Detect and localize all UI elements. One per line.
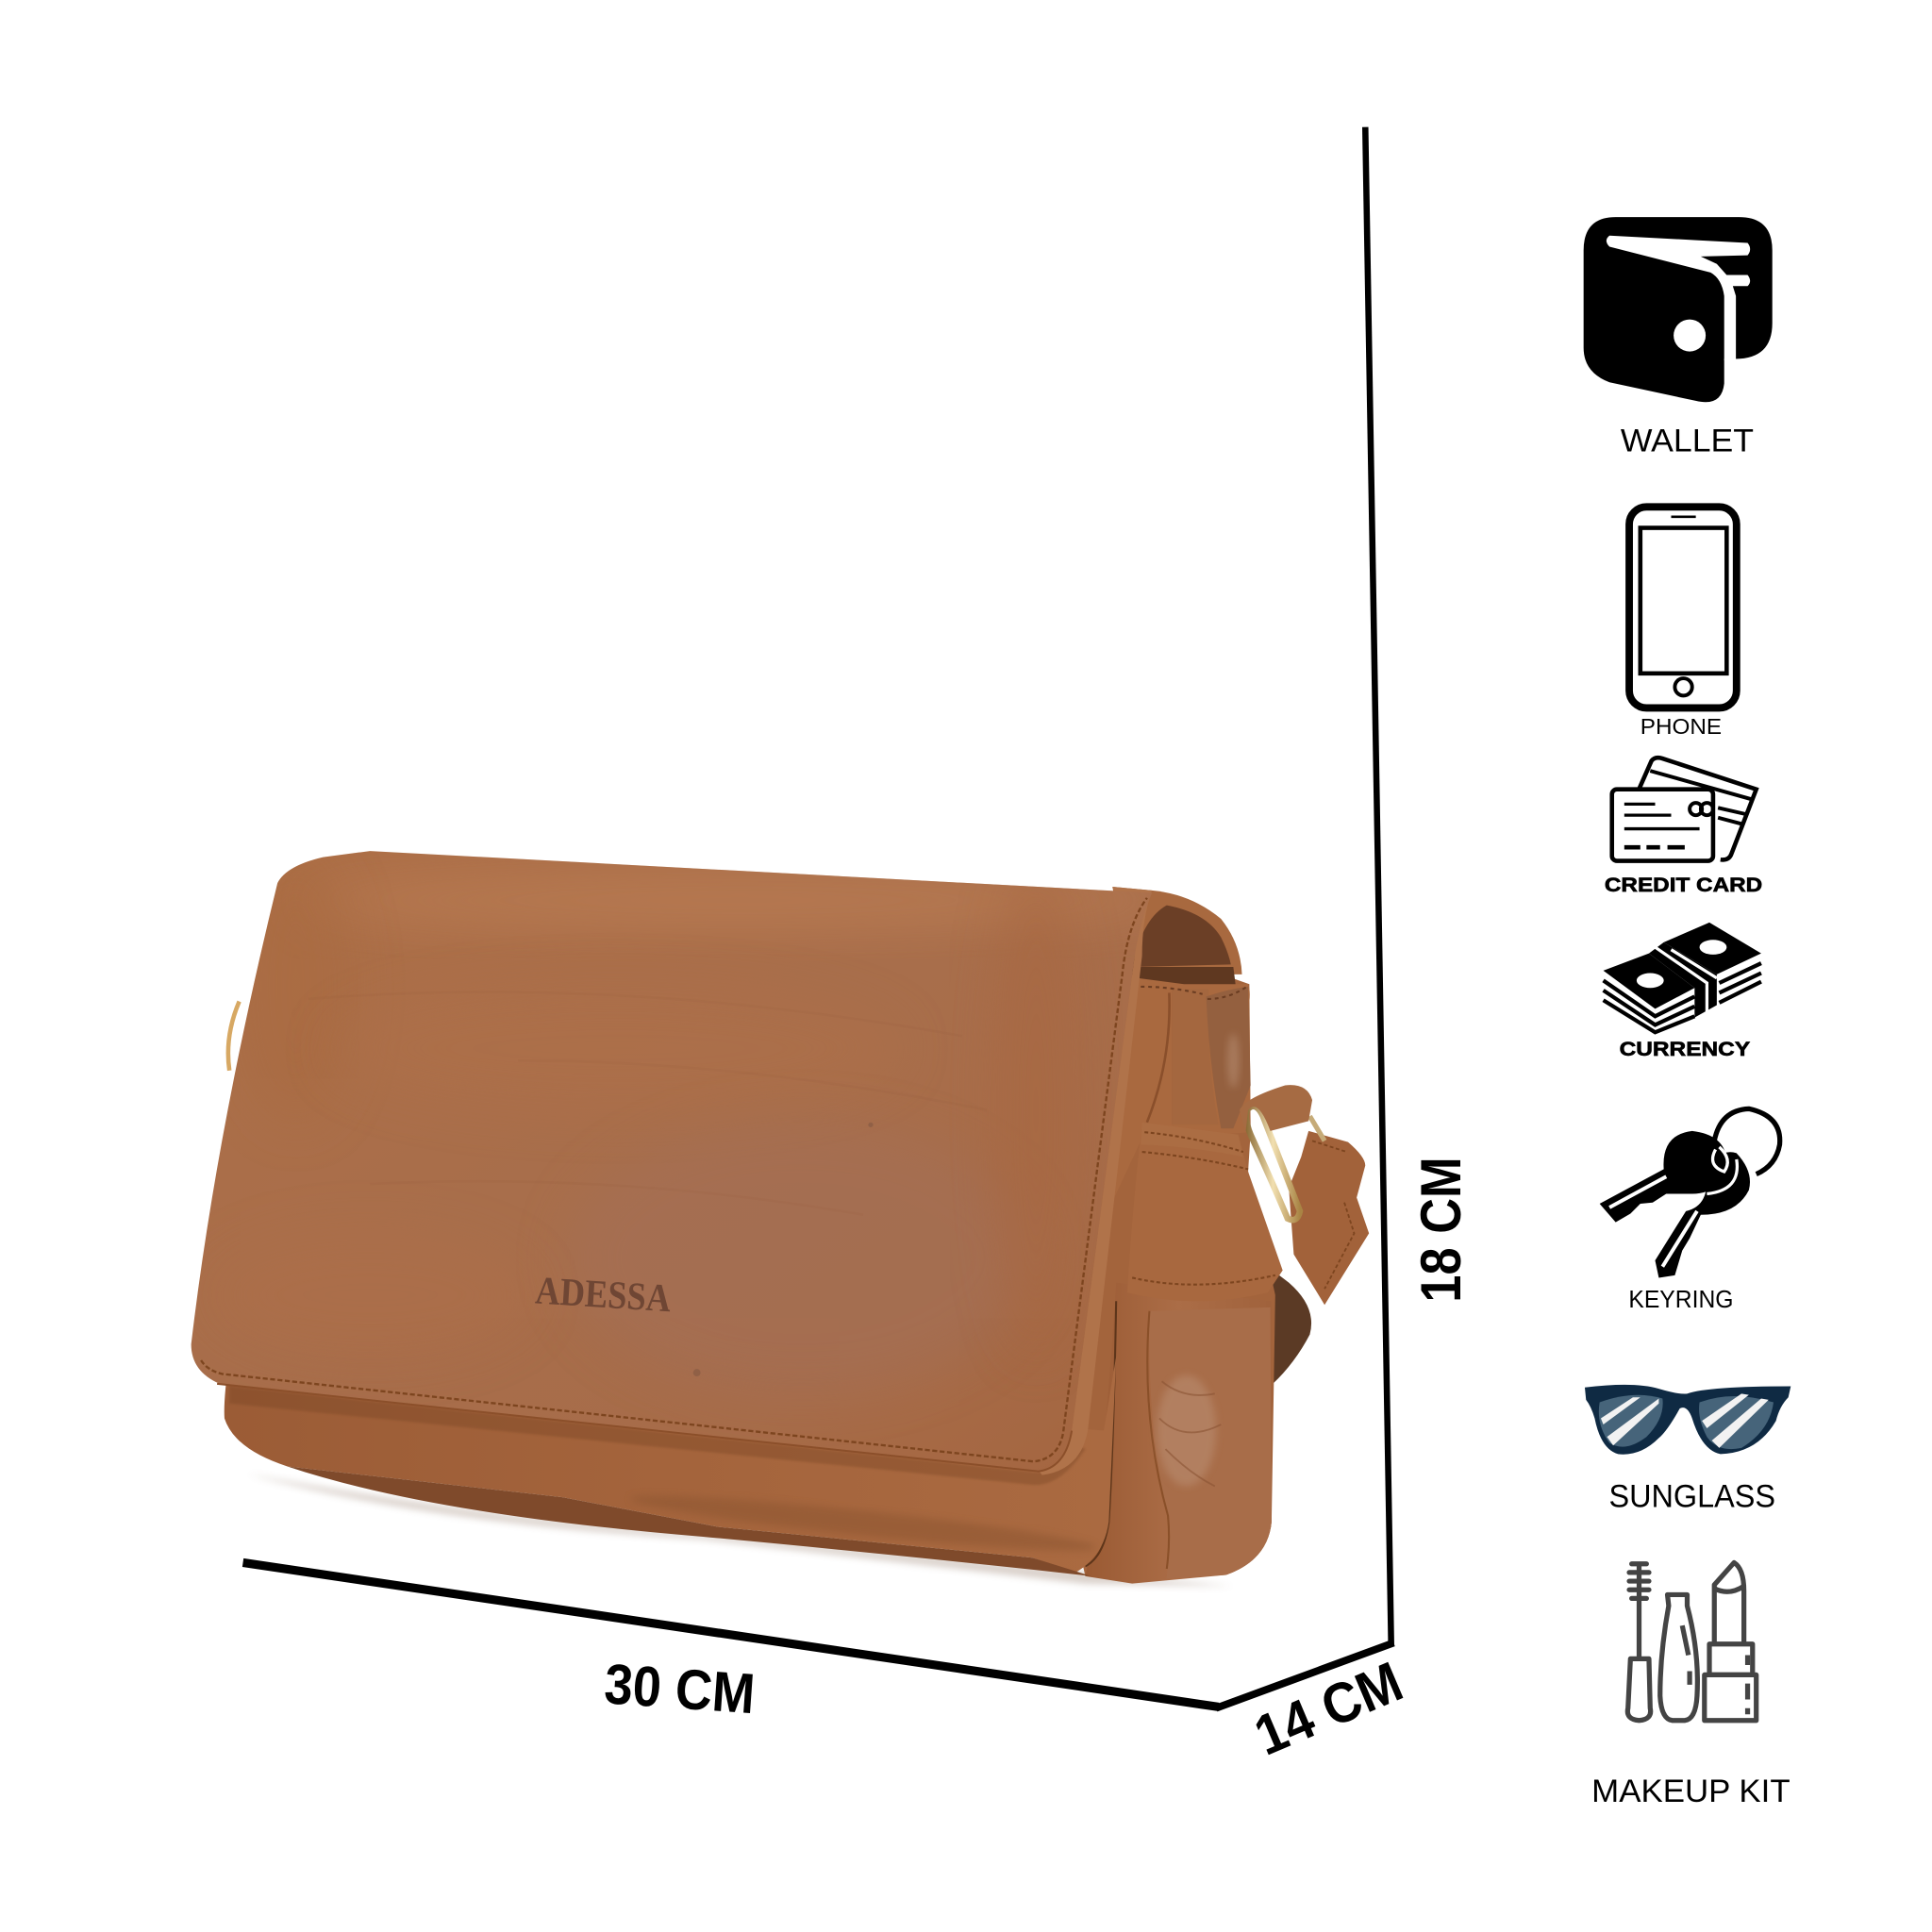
icon: keys and ring (1600, 1108, 1780, 1277)
icon: phone (1629, 507, 1737, 708)
flap rim and interior (1112, 887, 1242, 974)
right flap thickness (1036, 887, 1152, 1475)
label: 14 CM: 14 CM (1246, 1650, 1411, 1768)
flap stitching (201, 898, 1147, 1461)
label: 18 CM: 18 CM (1409, 1157, 1473, 1303)
dimension line: depth (1216, 1642, 1393, 1708)
back strap (1273, 1271, 1311, 1384)
icon: credit card (1612, 758, 1757, 861)
side gusset lower (1085, 1283, 1272, 1584)
upper strap tab (1240, 1085, 1312, 1132)
front body below flap (225, 1357, 1116, 1573)
label: makeup kit: MAKEUP KIT (1591, 1774, 1790, 1809)
dimension line: height (1365, 127, 1391, 1645)
left zipper pull (228, 1002, 240, 1071)
label: wallet: WALLET (1621, 423, 1754, 458)
ground shadow (246, 1474, 1233, 1586)
side silhouette (1060, 938, 1275, 1576)
icon: sunglasses (1585, 1385, 1790, 1455)
metal ring (1246, 1107, 1300, 1220)
icon: wallet (1584, 217, 1773, 402)
buckle loop strap (1127, 1123, 1283, 1301)
icon: currency (1604, 923, 1761, 1032)
label: currency: CURRENCY (1620, 1039, 1750, 1060)
label: 30 CM: 30 CM (603, 1652, 757, 1725)
lower strap tab (1289, 1131, 1369, 1305)
side gusset upper (1098, 976, 1251, 1233)
product photo: leather bag (192, 851, 1369, 1586)
label: credit card: CREDIT CARD (1605, 874, 1762, 896)
dimension line: width (243, 1562, 1219, 1707)
ADESSA logo: ADESSA (534, 1269, 672, 1321)
label: keyring: KEYRING (1628, 1285, 1734, 1313)
label: sunglass: SUNGLASS (1608, 1479, 1775, 1515)
flap shadow on body (229, 1386, 1085, 1485)
label: phone: PHONE (1641, 714, 1722, 739)
icon: makeup kit (1627, 1562, 1757, 1721)
flap (192, 851, 1184, 1472)
